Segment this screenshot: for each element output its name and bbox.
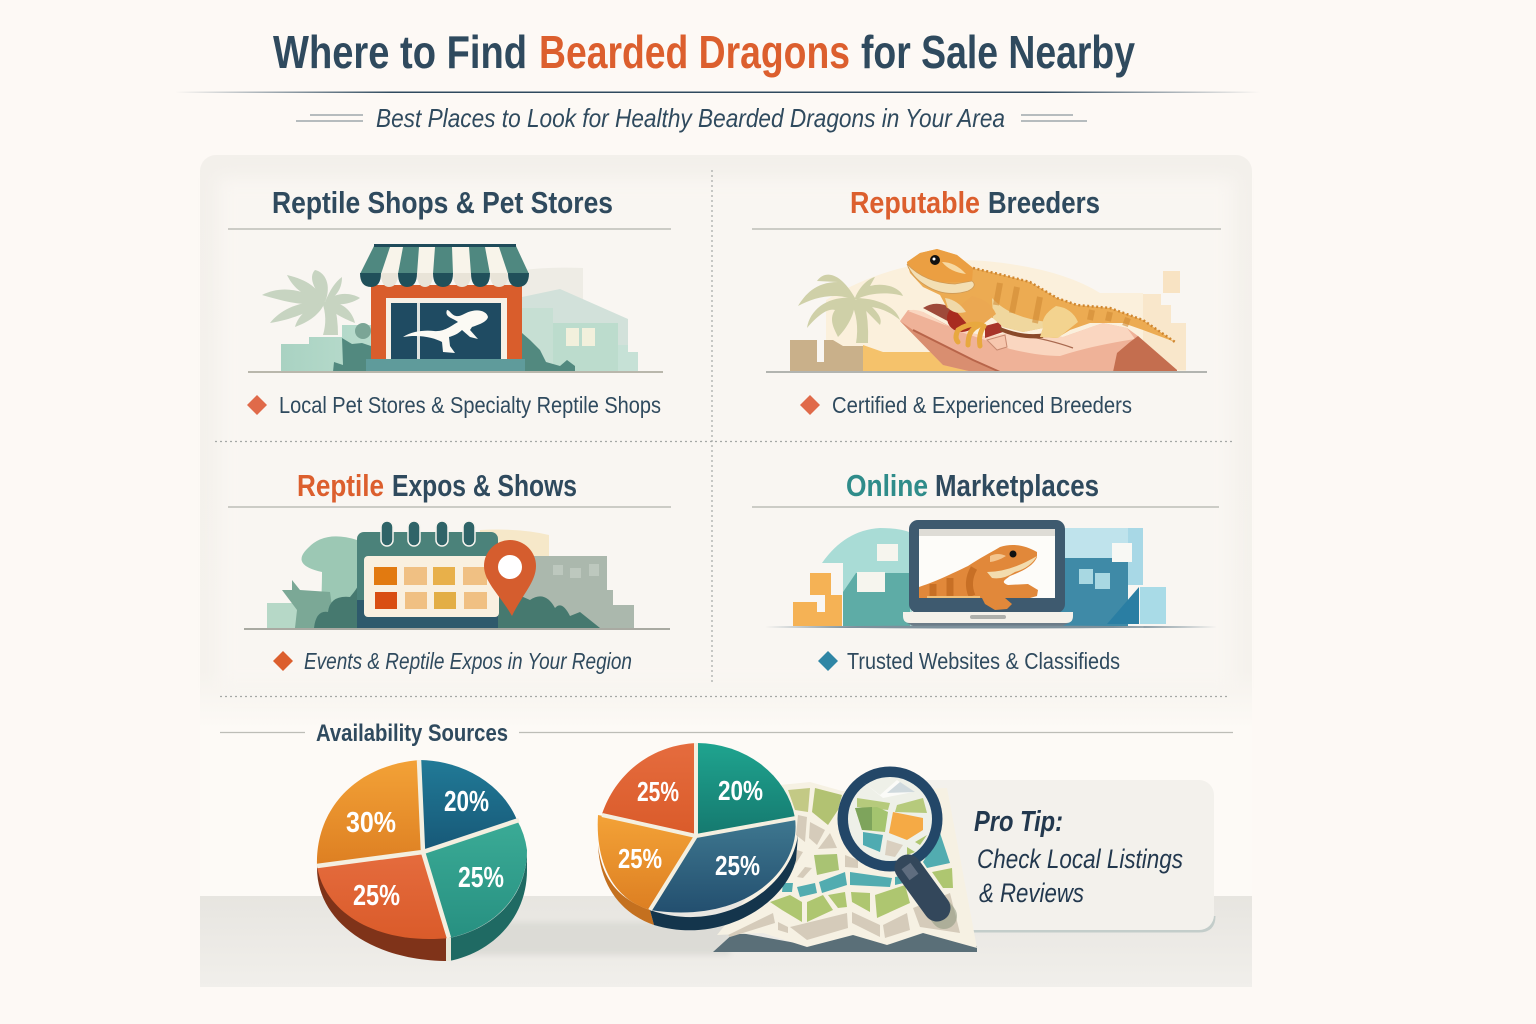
subtitle: Best Places to Look for Healthy Bearded Dragons in Your Area: [376, 103, 1005, 133]
dragon body: [1000, 327, 1045, 338]
pie 1 depth: [317, 850, 527, 961]
heading: online marketplaces: Marketplaces: [935, 468, 1099, 503]
pie 1 labels: 20%: [444, 786, 489, 818]
map blocks: [728, 788, 960, 940]
pie chart 1: [317, 760, 527, 961]
heading: reptile expos: Reptile: [297, 468, 384, 503]
pie 1 labels: 25%: [458, 862, 504, 894]
pro tip text: Pro Tip:: [974, 806, 1063, 838]
illustration: dragon on hand: [766, 249, 1207, 372]
pie chart 2: [598, 743, 798, 930]
map pin: [484, 540, 536, 616]
heading: reputable breeders: Reputable: [850, 185, 980, 220]
pro tip text: & Reviews: [979, 878, 1084, 908]
pie 2 labels: 20%: [718, 775, 763, 806]
pie 2 labels: 25%: [715, 850, 760, 881]
pie 1 labels: 30%: [346, 807, 396, 839]
palm: [262, 270, 360, 335]
bullet: certified breeders: Certified & Experienced Breeders: [832, 392, 1132, 418]
lizard decal: [403, 310, 488, 353]
heading: reptile shops: Reptile Shops & Pet Stores: [272, 185, 613, 220]
heading: online marketplaces: Online: [846, 468, 928, 503]
awning: [360, 246, 529, 274]
pro tip text: Check Local Listings: [977, 844, 1183, 874]
illustration: storefront: [248, 244, 663, 372]
main panel: [200, 155, 1252, 987]
illustration: calendar and pin: [244, 521, 670, 629]
pie 2 labels: [618, 775, 763, 881]
title: for Sale Nearby: [861, 26, 1135, 78]
illustration: folded map: [713, 766, 977, 952]
pro tip card: [900, 780, 1214, 931]
hand: [900, 310, 1177, 372]
bullet: events: Events & Reptile Expos in Your Region: [304, 648, 632, 674]
heading: availability sources: Availability Sources: [316, 720, 508, 747]
pro tip text: [974, 806, 1183, 908]
palm: [798, 275, 903, 343]
heading: reputable breeders: Breeders: [988, 185, 1100, 220]
title: Where to Find: [273, 26, 527, 78]
panel: reputable breeders: [752, 185, 1221, 418]
panel: online marketplaces: [752, 468, 1219, 674]
title: Bearded Dragons: [539, 26, 850, 78]
illustration: laptop with dragon: [765, 520, 1217, 628]
pie 2 labels: 25%: [637, 776, 679, 807]
panel: reptile shops and pet stores: [228, 185, 671, 418]
pie 1 labels: 25%: [353, 880, 400, 912]
bullet: local pet stores: Local Pet Stores & Specialty Reptile Shops: [279, 392, 661, 418]
panel: reptile expos and shows: [228, 468, 671, 674]
laptop dragon: [919, 545, 1038, 610]
magnifier: [838, 766, 944, 916]
heading: reputable breeders: [850, 185, 1100, 220]
heading: reptile expos: [297, 468, 577, 503]
heading: online marketplaces: [846, 468, 1099, 503]
heading: reptile expos: Expos & Shows: [392, 468, 577, 503]
pie 1 labels: [346, 786, 504, 912]
pie 2 depth: [598, 835, 798, 930]
pie 2 labels: 25%: [618, 843, 662, 874]
building: [371, 285, 522, 359]
bullet: trusted websites: Trusted Websites & Classifieds: [847, 648, 1120, 674]
title: [273, 26, 1135, 78]
